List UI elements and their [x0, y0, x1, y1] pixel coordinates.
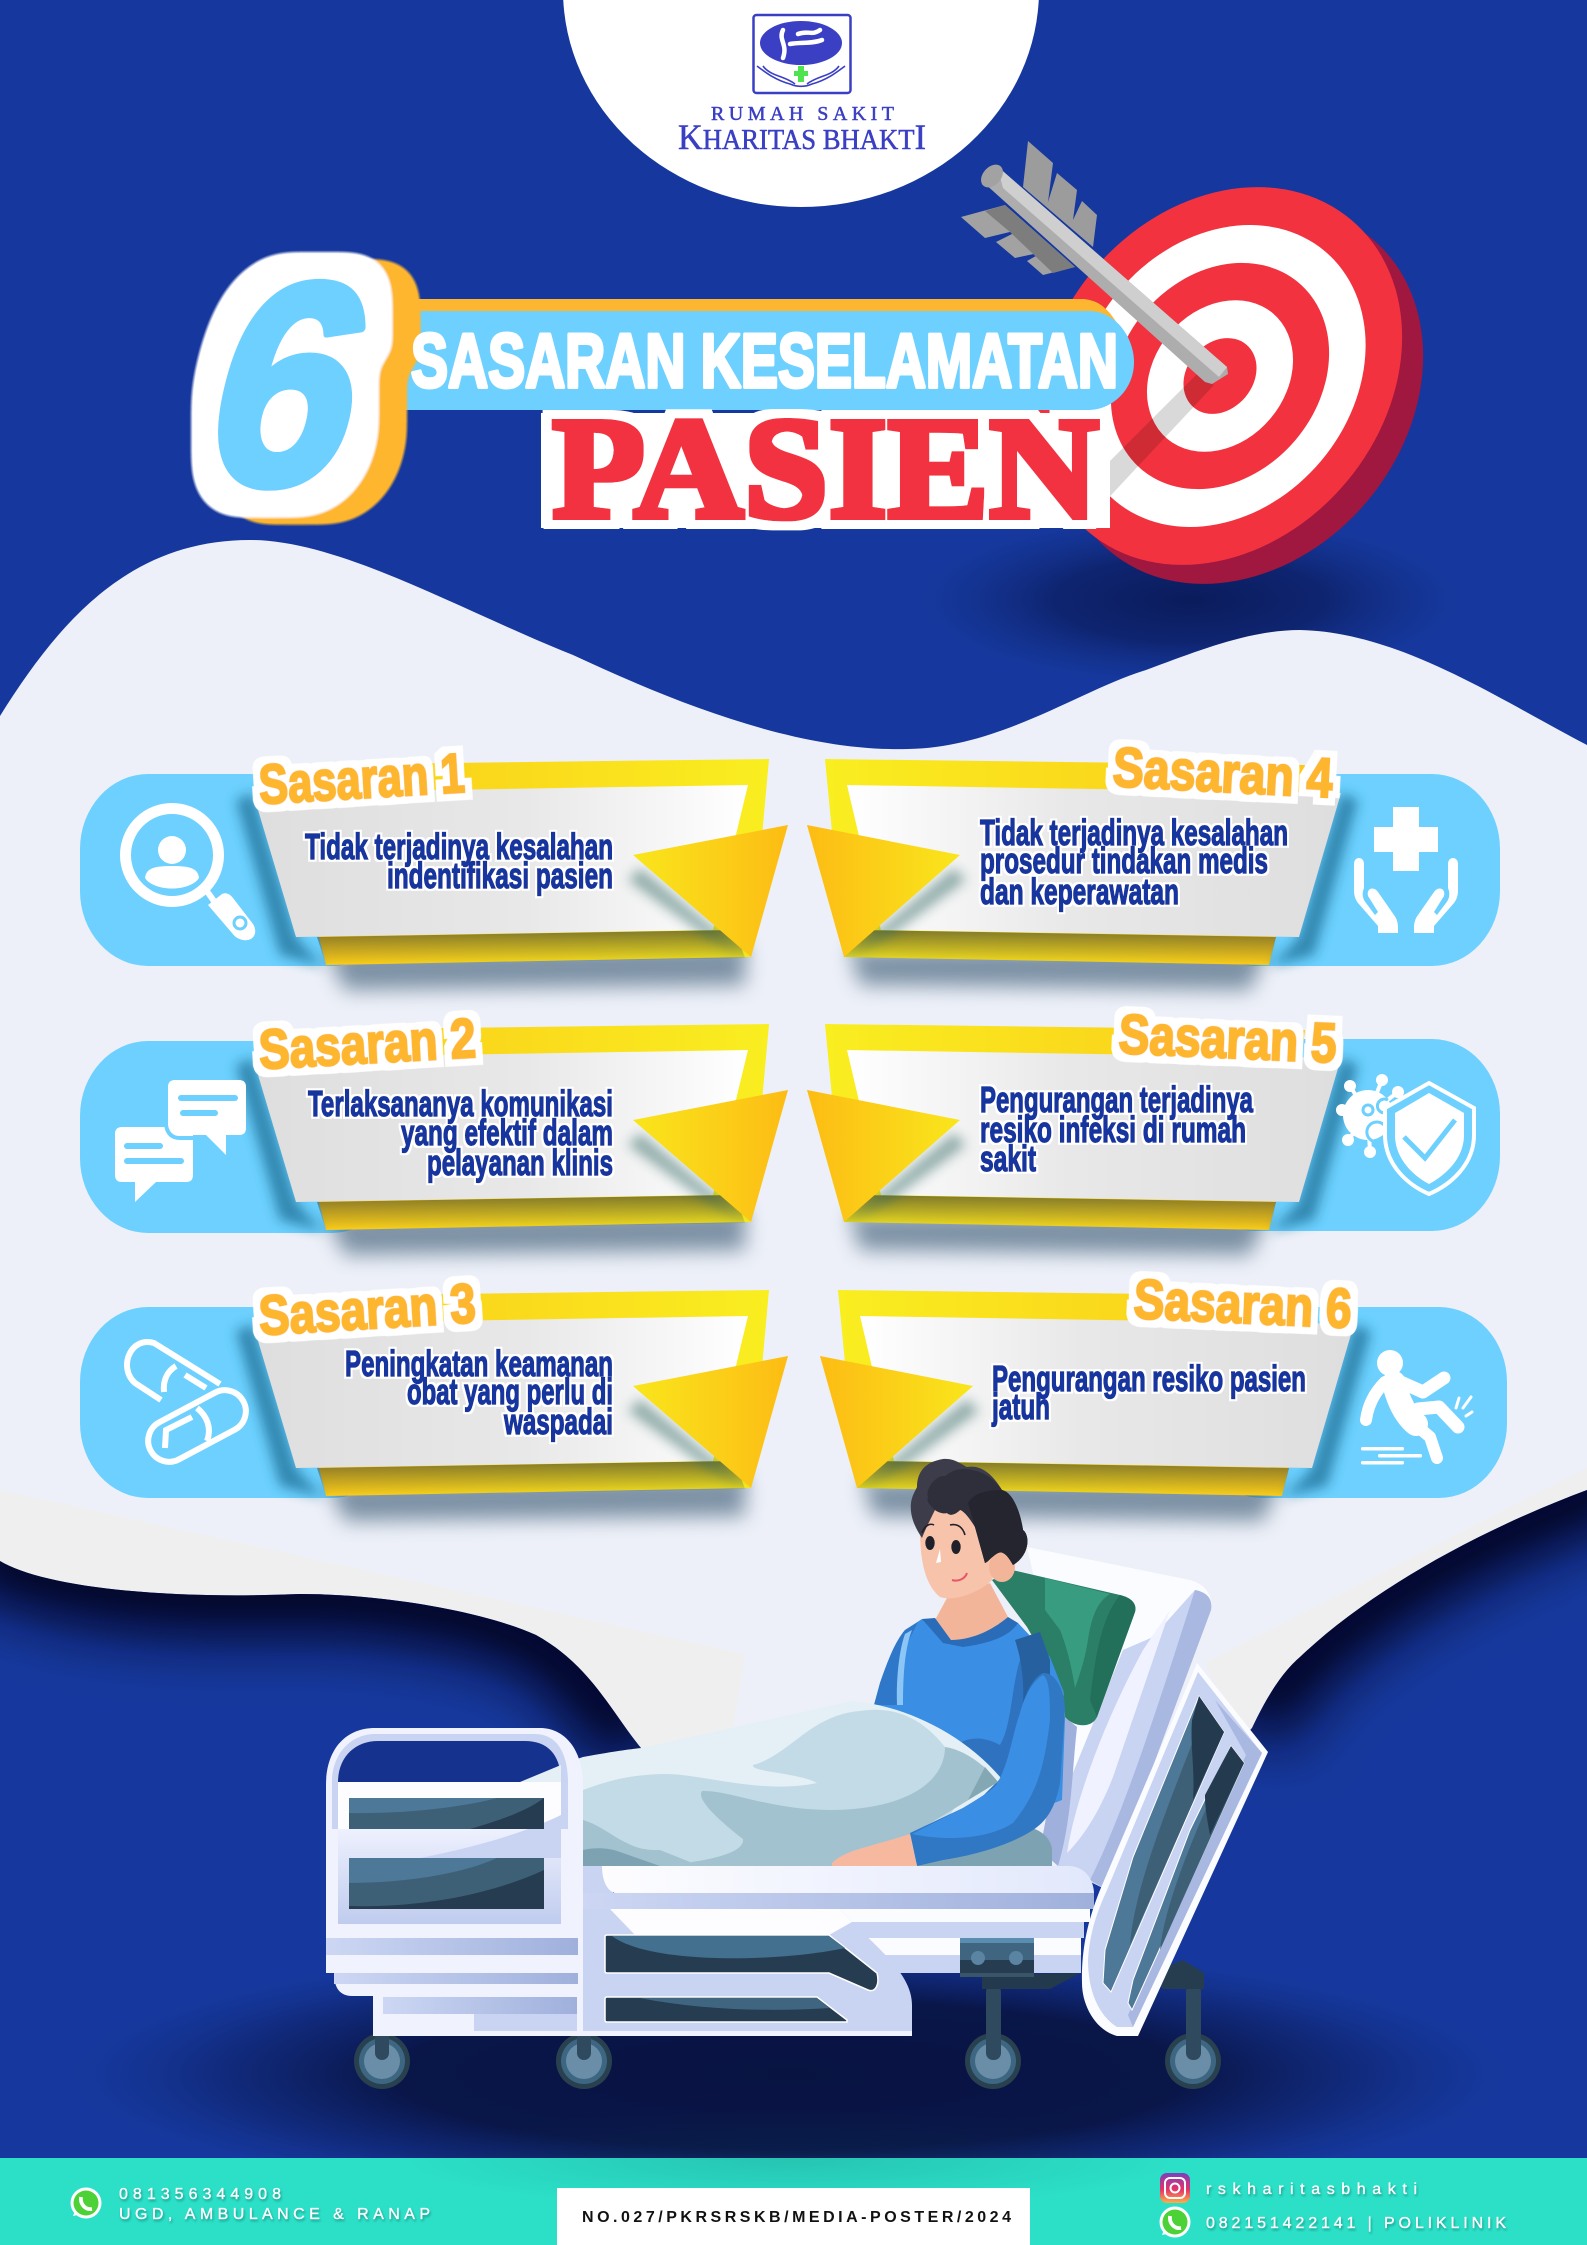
icon: capsules: [127, 1342, 253, 1469]
hospital name: RUMAH SAKIT: [711, 103, 894, 125]
bed back support: [1027, 1547, 1211, 1890]
blanket: [520, 1701, 1001, 1866]
icon: whatsapp right: [1160, 2206, 1190, 2238]
target drop shadow: [920, 515, 1460, 685]
card shape: [807, 1024, 1358, 1255]
pill: [80, 1307, 400, 1498]
description: [991, 1358, 1306, 1427]
icon: magnifier with person: [126, 808, 255, 940]
pill: [80, 1041, 400, 1233]
panel: Sasaran 2: [80, 1006, 788, 1255]
icon: whatsapp left: [70, 2188, 102, 2218]
panel: Sasaran 5: [807, 1002, 1500, 1255]
lap shadow: [917, 1828, 1052, 1866]
description: [980, 1079, 1254, 1179]
panel: footer bar: [0, 2158, 1587, 2245]
label: Sasaran 5: [1117, 1002, 1338, 1074]
contact left: UGD, AMBULANCE & RANAP: [119, 2206, 430, 2223]
description: resiko infeksi di rumah: [980, 1109, 1246, 1150]
description: Pengurangan resiko pasien: [992, 1358, 1306, 1399]
side panel: [583, 1909, 912, 2036]
illustration: patient on hospital bed: [326, 1459, 1268, 2089]
light wave panel: [0, 540, 1587, 1900]
bottom blue wave: [0, 1490, 1587, 1900]
description: prosedur tindakan medis: [980, 840, 1268, 881]
description: waspadai: [503, 1401, 613, 1442]
contact right: 082151422141 | POLIKLINIK: [1206, 2215, 1506, 2232]
icon: archery target: [962, 114, 1499, 657]
title: [182, 223, 1134, 549]
instagram handle: rskharitasbhakti: [1206, 2181, 1417, 2198]
panel: Sasaran 6: [820, 1267, 1507, 1521]
icon: arrow: [961, 141, 1228, 384]
document number box: [557, 2188, 1030, 2245]
patient hand: [832, 1834, 917, 1866]
description: pelayanan klinis: [427, 1142, 613, 1183]
grey ribbons behind bottom wave: [0, 1468, 1587, 1790]
pill: [1187, 1039, 1500, 1231]
pill: [1194, 1307, 1507, 1498]
panel: Sasaran 3: [80, 1271, 788, 1521]
title line 1: SASARAN KESELAMATAN: [411, 319, 1118, 404]
icon: hospital logo: [754, 15, 850, 93]
description: Tidak terjadinya kesalahan: [980, 812, 1288, 853]
patient neck: [935, 1583, 1008, 1640]
description: obat yang perlu di: [407, 1371, 613, 1412]
foot board: [326, 1728, 583, 2036]
description: indentifikasi pasien: [387, 855, 613, 896]
card shape: [807, 759, 1358, 990]
patient arm: [910, 1673, 1065, 1866]
icon: person falling: [1361, 1350, 1472, 1464]
description: [308, 1083, 613, 1183]
description: [980, 812, 1288, 912]
icon: wheels: [354, 1985, 1221, 2089]
panel: Sasaran 1: [80, 741, 788, 990]
card shape: [236, 759, 788, 990]
label: Sasaran 1: [257, 741, 466, 816]
label: Sasaran 4: [1111, 735, 1334, 809]
head board panel: [1082, 1663, 1268, 2036]
hospital name: KHARITAS BHAKTI: [678, 117, 926, 157]
footer contents: [70, 2173, 1506, 2245]
white logo disc: [563, 0, 1039, 207]
white plate behind title line 2: [541, 413, 1110, 528]
description: Peningkatan keamanan: [345, 1343, 613, 1384]
description: jatuh: [991, 1386, 1050, 1427]
footer shade: [390, 2110, 1190, 2210]
label: Sasaran 2: [257, 1006, 477, 1081]
icon: instagram: [1160, 2173, 1190, 2203]
bed floor shadow: [70, 1940, 1510, 2210]
description: Terlaksananya komunikasi: [308, 1083, 613, 1124]
patient torso: [874, 1619, 1065, 1840]
card shape: [236, 1024, 788, 1255]
bed frame: [583, 1866, 1094, 1973]
description: dan keperawatan: [980, 871, 1179, 912]
description: Tidak terjadinya kesalahan: [305, 826, 613, 867]
description: yang efektif dalam: [401, 1112, 613, 1153]
shirt collar: [922, 1617, 1018, 1647]
description: sakit: [980, 1138, 1036, 1179]
icon: virus and shield: [1336, 1074, 1474, 1194]
pill: [1187, 774, 1500, 966]
description: Pengurangan terjadinya: [980, 1079, 1254, 1120]
document number: NO.027/PKRSRSKB/MEDIA-POSTER/2024: [582, 2209, 1011, 2226]
title banner: [380, 299, 1134, 410]
patient head: [911, 1459, 1027, 1598]
contact left: [119, 2186, 430, 2223]
label: Sasaran 6: [1132, 1267, 1353, 1340]
icon: hands and cross: [1354, 807, 1458, 933]
description: [345, 1343, 613, 1442]
panel: Sasaran 4: [807, 735, 1500, 990]
green pillow: [992, 1570, 1135, 1725]
description: [305, 826, 613, 896]
label: Sasaran 3: [257, 1271, 477, 1347]
card shape: [820, 1290, 1371, 1521]
pill: [80, 774, 400, 966]
card shape: [236, 1290, 788, 1521]
contact left: 081356344908: [119, 2186, 281, 2203]
big number 6: 6: [182, 223, 400, 545]
logo badge: [563, 0, 1039, 207]
title line 2: PASIEN: [552, 389, 1099, 549]
connector block: [960, 1938, 1204, 1989]
icon: chat bubbles: [115, 1080, 246, 1202]
